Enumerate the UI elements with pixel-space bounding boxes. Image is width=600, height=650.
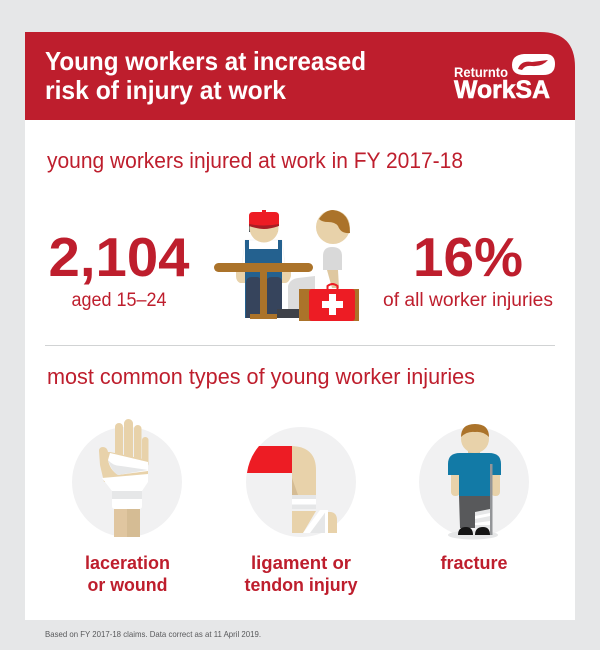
label: laceration: or wound: [88, 575, 168, 595]
title: [45, 46, 366, 105]
icon: bandaged knee: [246, 427, 356, 537]
first aid kit: [299, 284, 359, 321]
heading: injury types: most common types of young worker injuries: [47, 364, 475, 389]
panel: red header: [25, 32, 575, 120]
label: fracture: fracture: [440, 553, 508, 573]
icon: bandaged hand: [72, 419, 182, 537]
heading: injured at work: young workers injured at work in FY 2017-18: [47, 148, 463, 173]
illustration: injured worker and first aider: [214, 210, 359, 321]
label: laceration: laceration: [85, 553, 170, 573]
stat: 2,104 aged 15-24: 2,104: [48, 226, 190, 288]
panel: white card: [25, 120, 575, 620]
table: [214, 263, 313, 272]
logo: ReturnToWorkSA: Returnto: [454, 64, 508, 80]
worker: [236, 210, 291, 319]
labels: injury types: [85, 553, 508, 595]
stat: 16% of all worker injuries: [383, 226, 553, 311]
label: laceration: [85, 553, 170, 595]
title: Young workers at increased: [45, 46, 366, 76]
stat: 16% of all worker injuries: of all worker injuries: [383, 290, 553, 311]
stat: 2,104 aged 15-24: aged 15–24: [72, 290, 167, 311]
label: ligament: [244, 553, 358, 595]
first aider: [277, 210, 350, 318]
footnote: Based on FY 2017-18 claims. Data correct as at 11 April 2019.: [45, 629, 261, 639]
label: ligament: ligament or: [251, 553, 351, 573]
label: ligament: tendon injury: [244, 575, 358, 595]
logo: ReturnToWorkSA: [454, 54, 555, 104]
icon: person with fractured leg: [419, 424, 529, 540]
title: risk of injury at work: [45, 75, 287, 105]
logo: ReturnToWorkSA: WorkSA: [454, 76, 550, 104]
stat: 16% of all worker injuries: 16%: [413, 226, 523, 288]
